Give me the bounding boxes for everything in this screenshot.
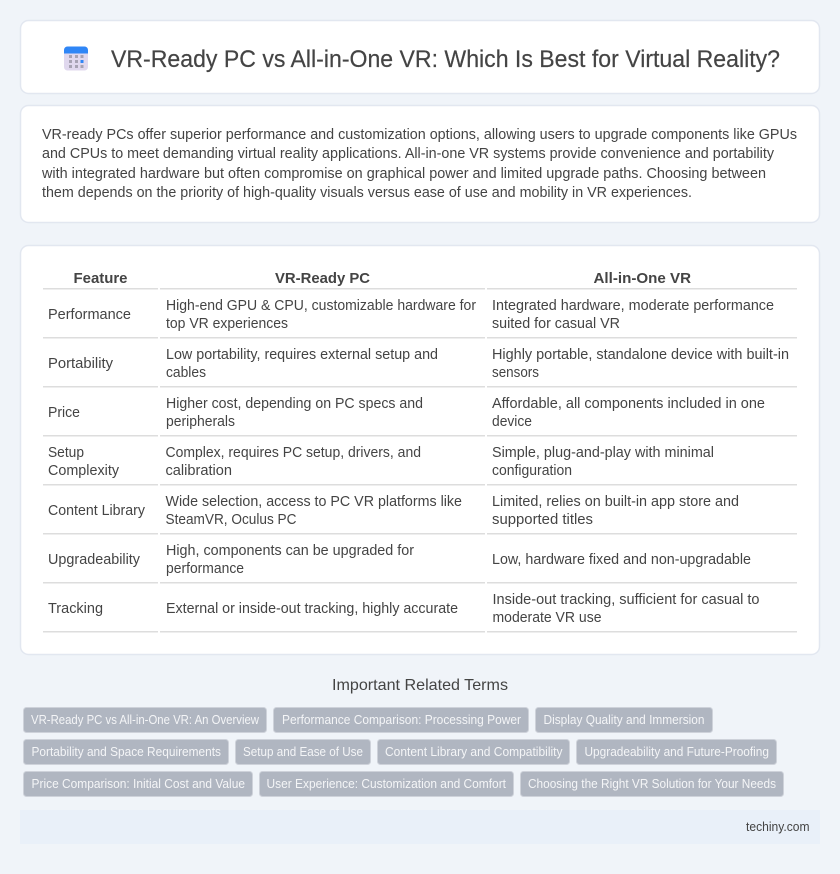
table header row (74, 270, 691, 287)
related term tags: Performance Comparison: Processing Power (282, 713, 521, 727)
header panel (20, 20, 820, 94)
row: portability (48, 347, 789, 381)
row: setup complexity (48, 445, 714, 479)
row: tracking: moderate VR use (492, 610, 602, 626)
related term tags: User Experience: Customization and Comfort (266, 777, 506, 791)
footer source: techiny.com (746, 820, 810, 834)
related term tags: Content Library and Compatibility (385, 745, 563, 759)
related term tags: Setup and Ease of Use (243, 745, 363, 759)
related term tags: Choosing the Right VR Solution for Your Needs (528, 777, 776, 791)
panel: comparison table (20, 246, 820, 654)
row: performance: Performance (48, 307, 131, 323)
row: content library: supported titles (492, 512, 593, 528)
row: performance: suited for casual VR (492, 316, 620, 332)
table header row: All-in-One VR (594, 270, 691, 287)
row: tracking (48, 592, 760, 626)
row: performance: Integrated hardware, moderate performance (492, 298, 774, 314)
panel: introduction (20, 106, 820, 222)
row: content library: Limited, relies on built-in app store and (492, 494, 739, 510)
intro text block: with integrated hardware but often compromise on graphical power and limited upgrade paths. Choosing between (41, 166, 766, 182)
intro text block: VR-ready PCs offer superior performance and customization options, allowing users to upgrade components like GPUs (42, 127, 797, 143)
intro text block: and CPUs to meet demanding virtual reality applications. All-in-one VR systems provide convenience and portability (42, 146, 775, 162)
row: setup complexity: Simple, plug-and-play with minimal (492, 445, 714, 461)
row: upgradeability: Upgradeability (48, 552, 141, 568)
row: price: Affordable, all components included in one (492, 396, 765, 412)
row: setup complexity: calibration (166, 463, 232, 479)
row: tracking: External or inside-out tracking, highly accurate (166, 601, 458, 617)
row: setup complexity: Setup (48, 445, 84, 461)
row: upgradeability: High, components can be upgraded for (166, 543, 414, 559)
row: tracking: Inside-out tracking, sufficient for casual to (492, 592, 760, 608)
intro text block: them depends on the priority of high-quality visuals versus ease of use and mobility in VR experiences. (42, 185, 692, 201)
related term tags (24, 708, 784, 796)
row: performance: top VR experiences (166, 316, 288, 332)
row: content library: Content Library (48, 503, 146, 519)
row: content library: Wide selection, access to PC VR platforms like (166, 494, 462, 510)
related term tags: VR-Ready PC vs All-in-One VR: An Overview (31, 713, 260, 727)
row: portability: Low portability, requires external setup and (166, 347, 438, 363)
row: upgradeability: Low, hardware fixed and non-upgradable (492, 552, 751, 568)
row: portability: Highly portable, standalone device with built-in (492, 347, 789, 363)
table header row: Feature (74, 270, 128, 287)
row: upgradeability (48, 543, 751, 577)
row: price: Higher cost, depending on PC specs and (166, 396, 423, 412)
related term tags: Display Quality and Immersion (544, 713, 705, 727)
title: VR-Ready PC vs All-in-One VR: Which Is Best for Virtual Reality? (111, 46, 780, 73)
table rules (43, 288, 797, 632)
row: performance (48, 298, 774, 332)
row: portability: Portability (48, 356, 114, 372)
row: price: Price (48, 405, 80, 421)
footer (20, 810, 820, 844)
row: price (48, 396, 765, 430)
row: setup complexity: Complexity (48, 463, 120, 479)
heading: related terms: Important Related Terms (332, 677, 508, 694)
row: setup complexity: configuration (492, 463, 572, 479)
related term tags: Portability and Space Requirements (32, 745, 221, 759)
row: content library (48, 494, 739, 528)
row: portability: cables (166, 365, 206, 381)
related term tags: Upgradeability and Future-Proofing (584, 745, 769, 759)
row: portability: sensors (492, 365, 539, 381)
row: upgradeability: performance (166, 561, 244, 577)
table header row: VR-Ready PC (275, 270, 370, 287)
row: price: peripherals (166, 414, 235, 430)
row: content library: SteamVR, Oculus PC (166, 512, 296, 528)
row: price: device (492, 414, 532, 430)
row: setup complexity: Complex, requires PC setup, drivers, and (166, 445, 421, 461)
related term tags: Price Comparison: Initial Cost and Value (32, 777, 245, 791)
row: tracking: Tracking (48, 601, 103, 617)
row: performance: High-end GPU & CPU, customizable hardware for (166, 298, 476, 314)
icon: calendar grid (64, 46, 88, 70)
intro text block (41, 127, 797, 201)
